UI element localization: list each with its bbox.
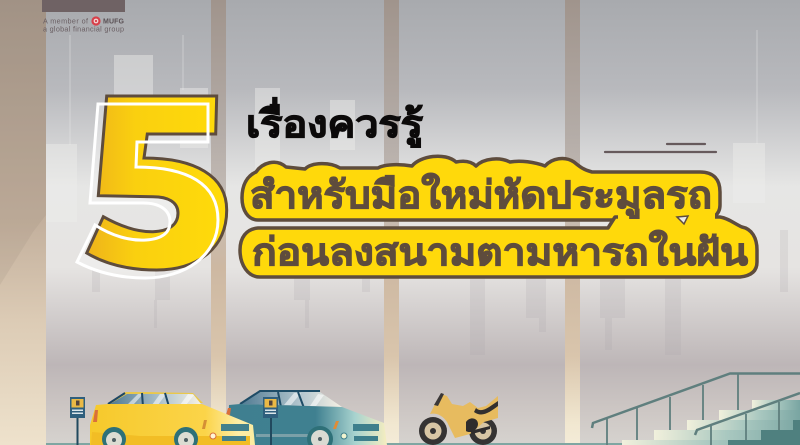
yellow car tail light [93,410,98,422]
teal car glass streaks [284,393,324,406]
number 5 translucent shadow [77,104,218,278]
teal car [226,391,387,445]
big number 5 [77,96,227,278]
yellow headline bubble [240,156,757,277]
number 5 white outline [77,104,218,278]
motorcycle [419,393,498,445]
yellow car front wheel [174,427,198,445]
parking sign middle [263,397,278,445]
teal car lower grille [354,436,378,441]
teal car rear light [226,408,231,415]
teal car body [228,404,387,445]
left foreground pillar [0,0,46,445]
yellow car body [90,404,255,445]
front wheel [419,417,447,445]
bubble row one [242,156,720,220]
logo block [42,0,125,34]
windshield [434,393,444,406]
yellow car windows [110,394,201,404]
pillar 3 [384,0,399,445]
stair shadow [728,420,800,445]
parking sign left [70,397,85,445]
number 5 fill [87,96,227,270]
steps [622,400,800,445]
teal car grille [353,424,379,431]
upper handrail [592,374,800,445]
yellow car glass streaks [128,394,194,405]
yellow car [90,392,255,445]
staircase [592,374,800,445]
seat [474,401,498,414]
heading line one: เรื่องควรรู้ [246,97,424,148]
teal car wheel [307,426,333,445]
pillar 2 [211,0,226,445]
group text: a global financial group [43,24,124,34]
yellow car headlight [210,433,216,439]
teal car lower strip [256,434,326,437]
MUFG mark [91,16,101,26]
rear wheel [469,417,497,445]
yellow car lower grille [222,436,246,441]
lower handrail [695,393,800,445]
bubble joint [618,210,715,226]
yellow car roof [107,392,203,404]
bubble line two: ก่อนลงสนามตามหารถในฝัน [252,230,748,274]
city skyline reflection [92,230,788,355]
logo bar [42,0,125,12]
teal car frame [240,391,320,408]
yellow car rear wheel [102,427,126,445]
decorative lines [605,144,716,152]
yellow car grille [221,424,249,431]
bubble line one: สำหรับมือใหม่หัดประมูลรถ [250,173,712,219]
yellow car lower panel [91,432,250,445]
member text: A member of [43,16,88,26]
ground strip [46,443,800,445]
teal car headlight [341,433,347,439]
pillar 4 [565,0,580,445]
yellow car side indicator [202,420,207,429]
MUFG wordmark: MUFG [103,18,125,26]
city skyline backdrop [46,55,765,222]
bubble row two [240,217,757,277]
bubble small gap [677,216,688,224]
skyline masts [69,30,758,145]
motorcycle body [430,394,498,438]
teal car glass [240,391,342,407]
yellow car pillars [108,393,170,410]
engine [466,418,490,434]
teal car indicator [333,421,339,429]
